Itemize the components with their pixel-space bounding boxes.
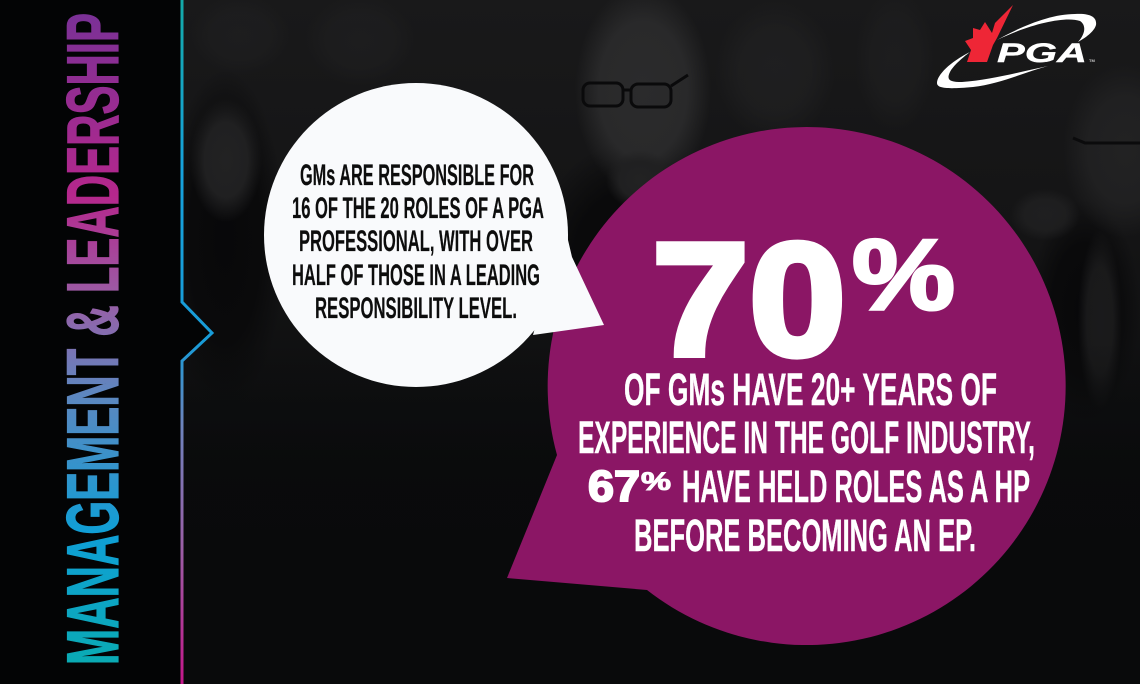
woman at left bbox=[165, 70, 285, 410]
logo: PGA: PGA bbox=[997, 38, 1087, 68]
logo: PGA bbox=[937, 5, 1096, 88]
bubble text: 16 OF THE 20 ROLES OF A PGA bbox=[292, 192, 544, 225]
purple speech bubble bbox=[507, 127, 1066, 645]
man at right bbox=[1010, 62, 1140, 420]
left sidebar bbox=[0, 0, 213, 684]
stat text: 67 bbox=[588, 462, 640, 511]
bubble text bbox=[292, 159, 544, 325]
stat text bbox=[578, 364, 1035, 561]
bubble text: PROFESSIONAL, WITH OVER bbox=[299, 225, 533, 258]
big stat: 70% bbox=[652, 210, 955, 390]
divider arrow bbox=[182, 0, 212, 684]
bubble text: HALF OF THOSE IN A LEADING bbox=[292, 259, 540, 292]
bubble text: GMs ARE RESPONSIBLE FOR bbox=[300, 159, 534, 192]
man's glasses bbox=[583, 75, 688, 107]
white speech bubble bbox=[264, 83, 604, 387]
big stat: 70%: 70 bbox=[652, 210, 846, 390]
man in centre bbox=[530, 0, 750, 380]
logo: PGA: TM bbox=[1089, 58, 1095, 63]
big stat: 70%: % bbox=[852, 219, 955, 331]
bubble text: RESPONSIBILITY LEVEL. bbox=[315, 292, 517, 325]
stat text: % bbox=[641, 468, 671, 496]
